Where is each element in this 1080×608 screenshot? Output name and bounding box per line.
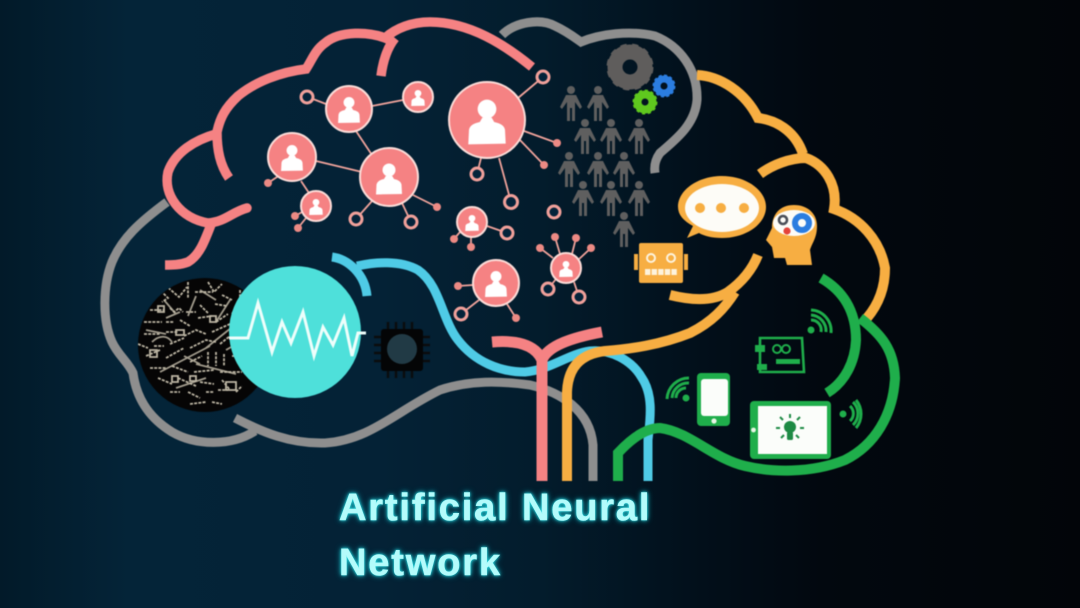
icon: tablet: [750, 401, 831, 459]
icon: green gear: [634, 91, 656, 113]
icon: blue gear: [654, 76, 674, 96]
icon: phone: [697, 373, 730, 426]
title: Artificial Neural: [339, 487, 651, 529]
person icons: [281, 90, 573, 297]
connections between people: [268, 77, 591, 318]
green line: [618, 278, 895, 481]
icon: robot: [634, 243, 688, 283]
pink stem: [492, 332, 602, 481]
person circles: [268, 82, 581, 306]
orange line: [567, 75, 885, 481]
icon: head with gears: [766, 205, 817, 265]
crowd of people: [558, 86, 650, 247]
title: [336, 487, 652, 584]
title: Network: [339, 542, 502, 584]
icon: chip: [374, 322, 430, 378]
icon: arduino board: [755, 338, 804, 372]
gray brain outline: [105, 22, 697, 481]
blue signal line: [332, 257, 650, 481]
pulse circle: [229, 266, 366, 398]
speech bubble: [678, 176, 766, 238]
icon: wifi tablet: [840, 400, 861, 428]
pink brain outline: [165, 22, 532, 265]
node group: ring nodes: [301, 71, 585, 320]
icon: wifi phone: [667, 378, 690, 402]
brain diagram: [100, 16, 901, 482]
node group: dot nodes: [264, 139, 595, 322]
icon: wifi board: [808, 310, 831, 334]
math circle: [138, 278, 272, 412]
icon: gray gear: [609, 46, 651, 88]
